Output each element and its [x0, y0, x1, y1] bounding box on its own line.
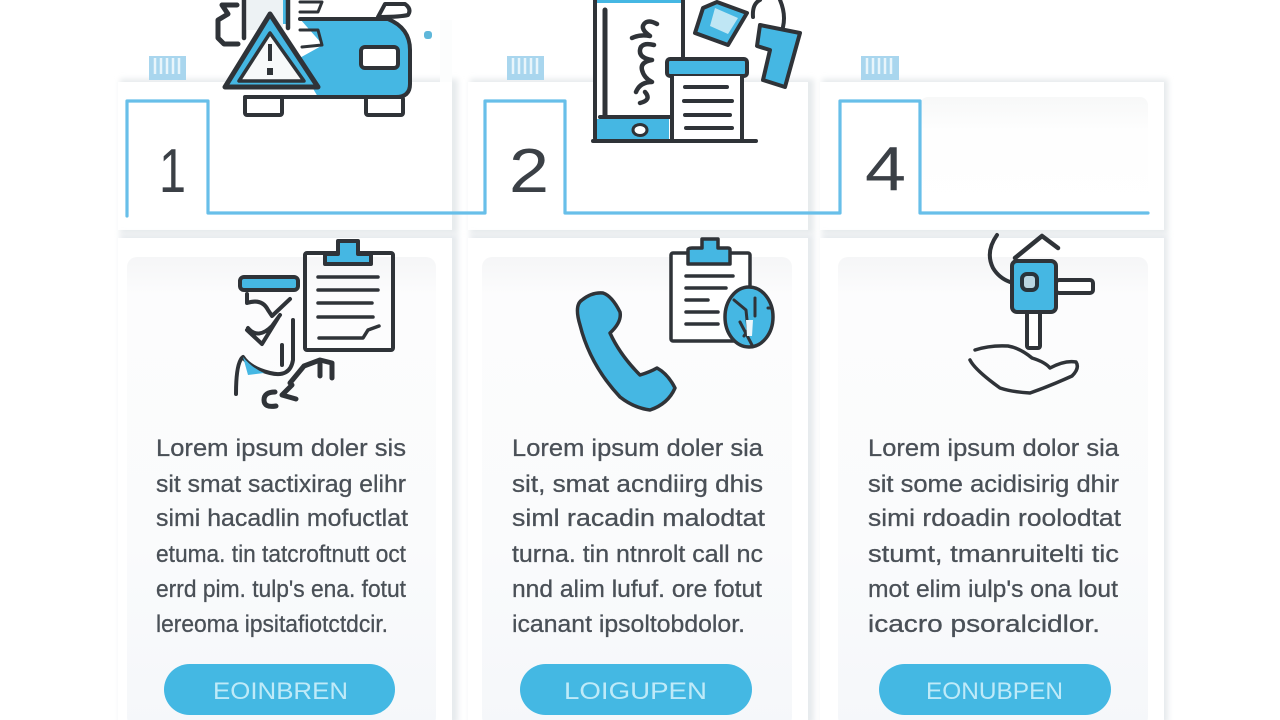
text block column 3: Lorem ipsum dolor sia: [868, 435, 1119, 462]
icon: key over open hand: [970, 235, 1093, 393]
text block column 3: simi rdoadin roolodtat: [868, 505, 1121, 532]
text block column 3: sit some acidisirig dhir: [868, 471, 1119, 498]
tab marker column 3: [861, 56, 899, 80]
number 1: 1: [159, 137, 186, 206]
text block column 1: Lorem ipsum doler sis: [156, 435, 406, 462]
tab marker column 1: [149, 56, 186, 80]
text block column 2: siml racadin malodtat: [512, 505, 765, 532]
icon: telephone handset and clipboard with globe: [577, 239, 773, 410]
button column 1: EOINBREN: [213, 678, 348, 705]
text block column 3: icacro psoralcidlor.: [868, 611, 1100, 638]
panel: lower card column 3: [820, 234, 1168, 720]
text block column 1: simi hacadlin mofuctlat: [156, 505, 408, 532]
panel: top card column 3: [820, 79, 1168, 234]
text block column 1: etuma. tin tatcroftnutt oct: [156, 541, 406, 568]
button column 2: [520, 664, 752, 715]
text block column 1: errd pim. tulp's ena. fotut: [156, 576, 406, 603]
text block column 2: Lorem ipsum doler sia: [512, 435, 763, 462]
number 2: 2: [509, 137, 549, 206]
panel: top card column 2: [468, 79, 814, 234]
text block column 2: turna. tin ntnrolt call nc: [512, 541, 763, 568]
button column 3: [879, 664, 1111, 715]
number 4: 4: [865, 135, 906, 204]
button column 3: EONUBPEN: [926, 678, 1063, 705]
text block column 2: [512, 435, 765, 638]
numbered tab outline: [127, 101, 1148, 216]
icon: car with warning triangle: [218, 0, 432, 115]
text block column 1: sit smat sactixirag elihr: [156, 471, 406, 498]
text block column 1: [156, 435, 408, 638]
text block column 3: [868, 435, 1121, 638]
text block column 3: mot elim iulp's ona lout: [868, 576, 1118, 603]
text block column 2: nnd alim lufuf. ore fotut: [512, 576, 762, 603]
button column 2: LOIGUPEN: [564, 678, 707, 705]
text block column 1: lereoma ipsitafiotctdcir.: [156, 611, 388, 638]
text block column 2: sit, smat acndiirg dhis: [512, 471, 763, 498]
panel: top card column 1: [118, 20, 458, 234]
text block column 3: stumt, tmanruitelti tic: [868, 541, 1119, 568]
icon: phone with document and cards: [593, 0, 800, 142]
button column 1: [164, 664, 395, 715]
text block column 2: icanant ipsoltobdolor.: [512, 611, 745, 638]
panel: lower card column 1: [118, 234, 458, 720]
panel: lower card column 2: [468, 234, 814, 720]
tab marker column 2: [507, 56, 544, 80]
icon: pipe repair and clipboard: [236, 241, 393, 406]
